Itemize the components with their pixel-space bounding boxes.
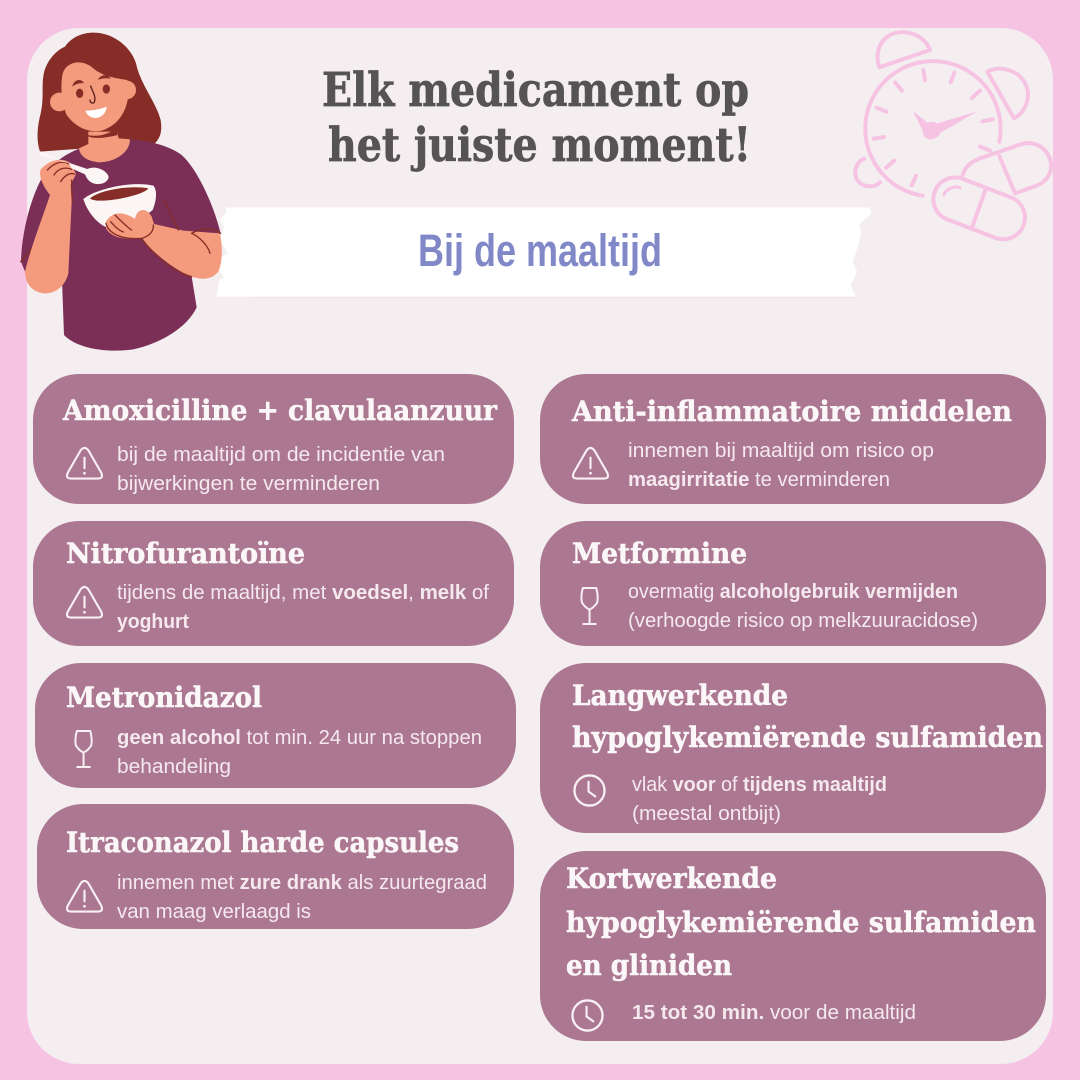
card: Metformine: (verhoogde risico op melkzuuracidose): [628, 610, 978, 632]
card: Langwerkende hypoglykemiërende sulfamiden: vlak voor of tijdens maaltijd: [632, 774, 887, 796]
card: Anti-inflammatoire middelen: innemen bij maaltijd om risico op: [628, 440, 934, 462]
card: Amoxicilline + clavulaanzuur: [33, 374, 514, 504]
card: Metformine: overmatig alcoholgebruik vermijden: [628, 581, 958, 603]
card: Anti-inflammatoire middelen: maagirritatie te verminderen: [628, 469, 890, 491]
left arm and hand: [25, 160, 76, 293]
subtitle tape banner: Bij de maaltijd: [418, 225, 662, 276]
ears: [50, 93, 69, 111]
card: Langwerkende hypoglykemiërende sulfamiden: Langwerkende: [572, 679, 788, 712]
card: Anti-inflammatoire middelen: [540, 374, 1046, 504]
hair: [38, 33, 161, 152]
card: Amoxicilline + clavulaanzuur: bij de maaltijd om de incidentie van: [117, 444, 445, 466]
card: Kortwerkende hypoglykemiërende sulfamiden en gliniden: [540, 851, 1046, 1041]
card: Anti-inflammatoire middelen: Anti-inflammatoire middelen: [571, 395, 1012, 428]
card: Nitrofurantoïne: [33, 521, 514, 646]
bowl: [83, 184, 156, 227]
card: Amoxicilline + clavulaanzuur: Amoxicilline + clavulaanzuur: [62, 394, 498, 427]
holding hand and right arm: [106, 210, 222, 279]
facial features: [72, 75, 111, 98]
title: Elk medicament op: [322, 63, 749, 118]
card: Kortwerkende hypoglykemiërende sulfamiden en gliniden: Kortwerkende: [566, 862, 777, 895]
card: Metronidazol: behandeling: [117, 756, 231, 778]
card: Itraconazol harde capsules: innemen met zure drank als zuurtegraad: [117, 872, 487, 894]
card: Langwerkende hypoglykemiërende sulfamiden: [540, 663, 1046, 833]
card: Metronidazol: [35, 663, 516, 788]
card: Amoxicilline + clavulaanzuur: bijwerkingen te verminderen: [117, 473, 380, 495]
card: Langwerkende hypoglykemiërende sulfamiden: hypoglykemiërende sulfamiden: [572, 721, 1043, 754]
card: Itraconazol harde capsules: Itraconazol harde capsules: [66, 826, 459, 859]
face: [61, 62, 128, 131]
card: Itraconazol harde capsules: van maag verlaagd is: [117, 901, 311, 923]
card: Itraconazol harde capsules: [37, 804, 514, 929]
card: Nitrofurantoïne: Nitrofurantoïne: [66, 537, 305, 570]
subtitle tape banner: [216, 207, 871, 298]
icon: alarm clock and pills: [855, 32, 1051, 246]
title: [322, 63, 751, 173]
card: Nitrofurantoïne: tijdens de maaltijd, met voedsel, melk of: [117, 582, 489, 604]
illustration: woman eating from a bowl: [21, 33, 222, 351]
shirt: [21, 139, 221, 351]
card: Metronidazol: geen alcohol tot min. 24 uur na stoppen: [117, 727, 482, 749]
card: Metformine: Metformine: [572, 537, 747, 570]
neck: [79, 132, 130, 162]
card: Kortwerkende hypoglykemiërende sulfamiden en gliniden: 15 tot 30 min. voor de maaltijd: [632, 1002, 916, 1024]
card: Kortwerkende hypoglykemiërende sulfamiden en gliniden: en gliniden: [566, 949, 732, 982]
card: Metronidazol: Metronidazol: [66, 681, 262, 714]
card: Nitrofurantoïne: yoghurt: [117, 611, 189, 633]
card: Metformine: [540, 521, 1046, 646]
card: Langwerkende hypoglykemiërende sulfamiden: (meestal ontbijt): [632, 803, 781, 825]
card: Kortwerkende hypoglykemiërende sulfamiden en gliniden: hypoglykemiërende sulfamiden: [566, 906, 1036, 939]
spoon: [39, 151, 109, 184]
title: het juiste moment!: [328, 118, 751, 173]
